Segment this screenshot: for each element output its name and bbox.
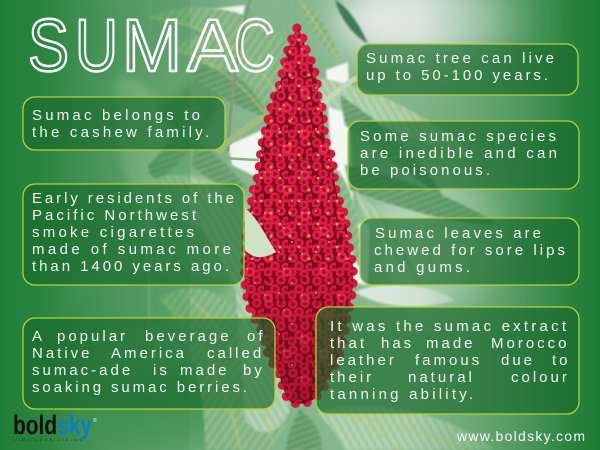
panel: lifespan: up to 50-100 years. (366, 67, 551, 84)
panel: sumac-ade: made (180, 362, 230, 379)
panel: lifespan (357, 44, 578, 95)
panel: Pacific Northwest: Early residents of the (32, 190, 237, 207)
panel: Pacific Northwest: made of sumac more (32, 241, 234, 258)
panel: Pacific Northwest (23, 184, 244, 285)
panel: Pacific Northwest: than 1400 years ago. (32, 258, 232, 275)
panel: Morocco leather: leather (330, 352, 397, 369)
title (28, 4, 275, 87)
panel: sumac-ade (23, 318, 275, 409)
flower: red sumac cone (240, 20, 360, 415)
logo: boldsky: LIMITLESS LIVING (14, 438, 82, 442)
panel: sore lips and gums: chewed for sore lips (374, 242, 568, 259)
panel: inedible species (348, 121, 579, 189)
panel: Morocco leather (316, 307, 579, 414)
panel: sumac-ade: of (247, 328, 266, 345)
panel: Pacific Northwest: Pacific Northwest (32, 207, 199, 224)
panel: sore lips and gums (360, 218, 579, 285)
foreground leaves around the flower (145, 0, 500, 450)
title: C (234, 4, 275, 87)
panel: Morocco leather: natural (408, 369, 475, 386)
panel: Morocco leather: that (330, 335, 367, 352)
panel: sumac-ade: Native (32, 345, 93, 362)
leaf in front of flower (245, 208, 276, 257)
panel: sumac-ade: popular (57, 328, 128, 345)
title: M (122, 4, 182, 87)
panel: sumac-ade: called (207, 345, 264, 362)
title: S (28, 4, 69, 87)
panel: sumac-ade: soaking sumac berries. (32, 379, 250, 396)
panel: cashew family: the cashew family. (32, 124, 212, 141)
panel: sumac-ade: America (111, 345, 187, 362)
leaf midribs (150, 0, 480, 450)
blurred left leaves (60, 20, 262, 329)
title: U (75, 4, 118, 87)
panel: lifespan: Sumac tree can live (366, 50, 557, 67)
panel: Morocco leather: It was the sumac extract (330, 318, 569, 335)
panel: cashew family: Sumac belongs to (32, 107, 203, 124)
panel: Morocco leather: has (381, 335, 414, 352)
panel: sumac-ade: beverage (145, 328, 232, 345)
panel: Morocco leather: colour (511, 369, 570, 386)
soft background tones (50, 0, 525, 450)
panel: Morocco leather: famous (415, 352, 482, 369)
panel: Pacific Northwest: smoke cigarettes (32, 224, 197, 241)
panel: inedible species: are inedible and can (360, 145, 560, 162)
panel: Morocco leather: due (501, 352, 535, 369)
panel: sore lips and gums: and gums. (374, 259, 473, 276)
logo: boldsky: ® (93, 417, 97, 424)
logo: boldsky: boldsky (13, 410, 92, 440)
panel: Morocco leather: their (330, 369, 374, 386)
panel: Morocco leather: tanning ability. (330, 386, 476, 403)
panel: inedible species: Some sumac species (360, 128, 559, 145)
panel: Morocco leather: made (426, 335, 476, 352)
panel: cashew family (23, 97, 225, 150)
panel: inedible species: be poisonous. (360, 162, 493, 179)
panel: sumac-ade: A (32, 328, 45, 345)
sky patches (205, 5, 370, 285)
panel: Morocco leather: Morocco (491, 335, 570, 352)
stems (148, 0, 356, 330)
panel: sumac-ade: is (153, 362, 170, 379)
panel: sumac-ade: sumac-ade (32, 362, 133, 379)
website url: www.boldsky.com (456, 428, 585, 444)
panel: Morocco leather: to (552, 352, 571, 369)
panel: sore lips and gums: Sumac leaves are (375, 225, 544, 242)
title: A (187, 4, 239, 87)
panel: sumac-ade: by (243, 362, 265, 379)
